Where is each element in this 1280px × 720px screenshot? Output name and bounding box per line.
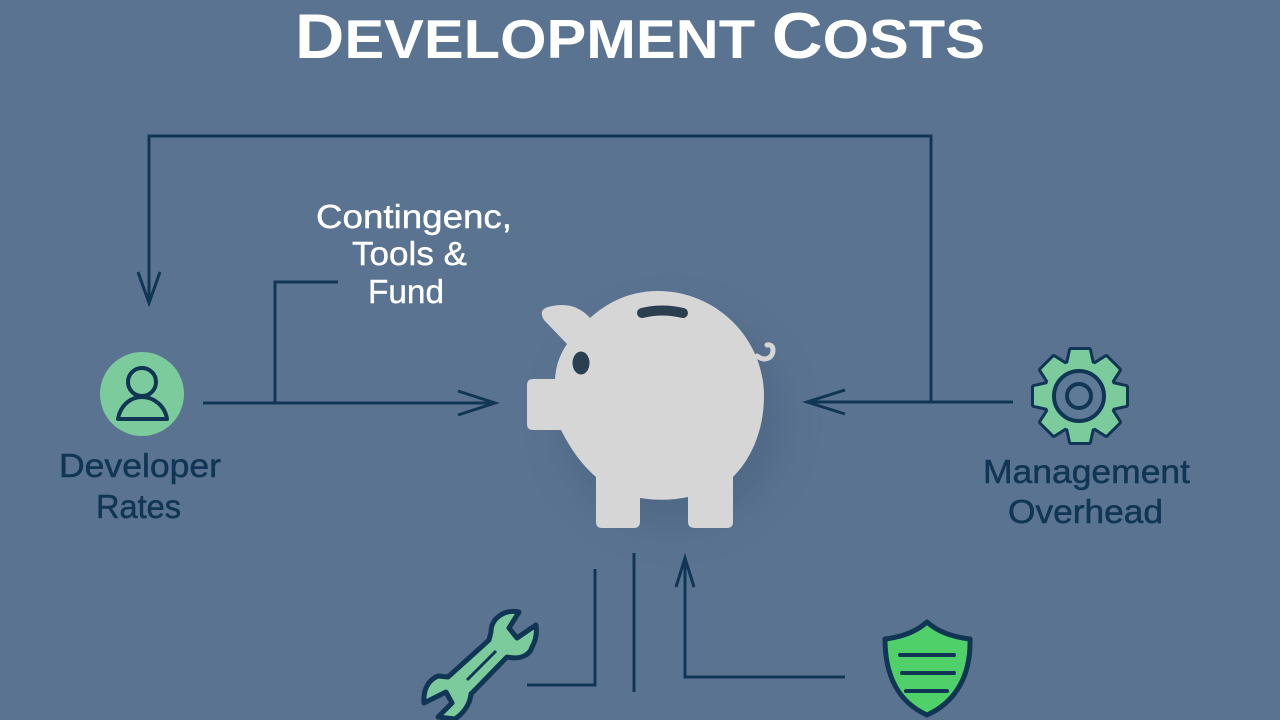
icon: shield	[885, 622, 970, 715]
coin slot	[642, 310, 683, 313]
text: contingency, tools and fund: Contingenc,	[316, 198, 512, 235]
arrow: shield to piggy bank	[676, 558, 845, 677]
arrow: feedback loop from management overhead to developer rates	[138, 136, 931, 402]
pig shadow	[560, 312, 784, 528]
connector: contingency and tools fund	[275, 282, 338, 403]
text: contingency, tools and fund	[316, 198, 512, 310]
connector: central vertical line	[632, 553, 636, 692]
title: DEVELOPMENT COSTS	[295, 0, 985, 72]
label: developer rates	[59, 447, 221, 525]
label: management overhead	[983, 453, 1190, 530]
label: developer rates: Rates	[96, 488, 181, 525]
text: contingency, tools and fund: Fund	[368, 273, 444, 310]
pig eye	[572, 352, 590, 374]
connector: wrench to piggy bank	[527, 569, 595, 685]
pig tail	[757, 345, 773, 359]
label: management overhead: Management	[983, 453, 1190, 490]
arrow: developer rates to piggy bank	[203, 391, 495, 415]
pig silhouette	[527, 291, 764, 528]
icon: developer avatar	[100, 352, 184, 436]
icon: piggy bank	[527, 291, 784, 528]
label: developer rates: Developer	[59, 447, 221, 484]
arrow: management overhead to piggy bank	[807, 390, 1013, 414]
text: contingency, tools and fund: Tools &	[352, 235, 467, 272]
label: management overhead: Overhead	[1008, 493, 1163, 530]
icon: management gear	[1034, 350, 1126, 442]
icon: wrench	[424, 611, 536, 719]
